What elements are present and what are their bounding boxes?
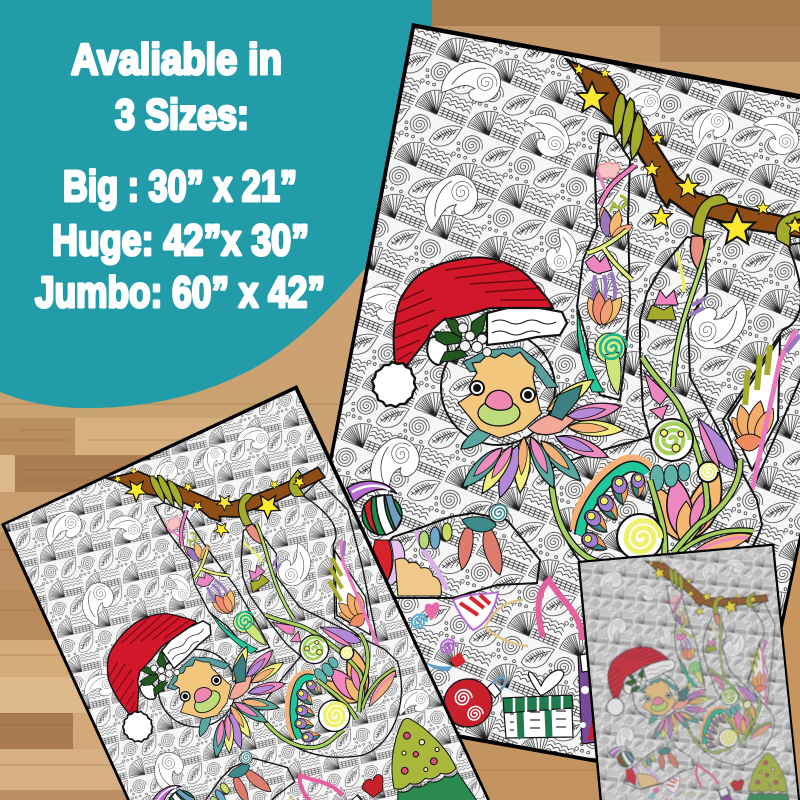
sloth body and far arm xyxy=(548,236,762,611)
purple gift xyxy=(578,652,612,744)
pattern: white paisley swirls xyxy=(355,52,800,699)
teal size badge xyxy=(0,0,432,408)
holly xyxy=(435,312,492,362)
hat pompom xyxy=(372,362,416,407)
face xyxy=(458,352,542,438)
muzzle xyxy=(478,400,520,426)
size: Huge: Huge: 42”x 30” xyxy=(52,216,309,265)
arm flower stack xyxy=(577,162,635,395)
size: Jumbo: Jumbo: 60” x 42” xyxy=(35,268,325,317)
small poster: big size xyxy=(471,469,800,800)
beige leaf outline xyxy=(485,600,528,646)
christmas ornament xyxy=(347,481,402,535)
far arm hand and flower xyxy=(646,236,708,387)
christmas tree xyxy=(620,582,785,765)
branch xyxy=(567,60,800,242)
sloth near arm xyxy=(577,133,635,400)
sloth head with santa hat xyxy=(372,257,624,500)
red bow xyxy=(612,642,646,668)
stars xyxy=(573,63,800,244)
eyes xyxy=(470,381,535,402)
red ornament xyxy=(444,677,505,727)
left poster: huge size xyxy=(0,248,676,800)
bottom decorations xyxy=(412,580,646,744)
teal hood xyxy=(463,347,558,388)
vines xyxy=(552,357,753,564)
large poster: jumbo xyxy=(330,23,800,763)
nose xyxy=(485,390,513,410)
collar leaves xyxy=(457,373,624,500)
red bit xyxy=(450,652,466,668)
pink leaf outline xyxy=(538,580,583,640)
sloth third arm xyxy=(723,240,800,495)
hat red xyxy=(394,257,553,365)
blue swirl xyxy=(412,614,427,628)
heading: Avaliable in: Avaliable in xyxy=(71,35,282,84)
red chevron wedge xyxy=(453,592,498,630)
peacock feathers xyxy=(577,461,648,556)
pink and orange feathers xyxy=(644,372,752,555)
size: Big: Big : 30” x 21” xyxy=(63,162,297,211)
heading: 3 Sizes: 3 Sizes: xyxy=(115,91,249,139)
hat brim xyxy=(487,308,567,345)
fern spirals xyxy=(617,419,718,560)
heart xyxy=(425,602,439,620)
branch ropes xyxy=(613,93,800,247)
green gift xyxy=(503,670,573,738)
blue bit xyxy=(425,662,453,671)
purple swirl xyxy=(441,640,456,653)
sloth leg and foot xyxy=(360,504,540,598)
